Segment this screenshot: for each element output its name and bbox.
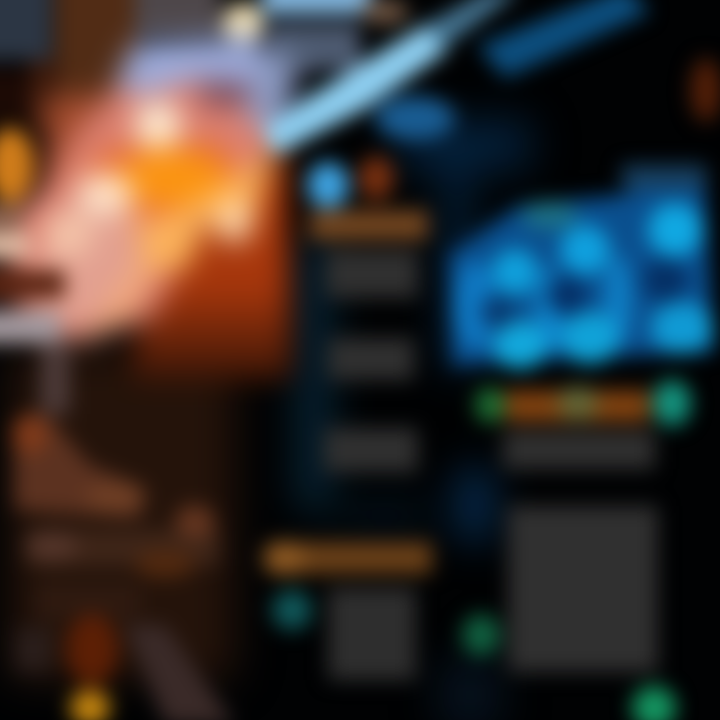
text block: right column body — [508, 506, 658, 672]
panel: dim background glows — [10, 120, 530, 720]
illustration: left edge stripes — [0, 127, 70, 414]
text block: right column subtitle — [503, 431, 655, 469]
icon: green dot bottom — [632, 686, 676, 720]
icon: yellow badge — [70, 690, 110, 720]
icon: blue circle — [307, 162, 349, 208]
illustration: explosion — [10, 35, 300, 345]
text block: lower centre — [328, 588, 416, 680]
icon: green dot middle — [462, 614, 500, 656]
panel: blue glowing chart — [448, 165, 714, 369]
panel: top left haze — [0, 0, 409, 130]
icon: teal square — [272, 590, 312, 630]
illustration: lower left brown shapes — [12, 412, 235, 720]
heading: centre column — [310, 210, 428, 240]
icon: brown circle — [358, 156, 394, 200]
illustration: red-orange lower glow — [45, 95, 292, 380]
heading: lower centre — [263, 541, 432, 575]
heading: right column — [475, 380, 691, 426]
illustration: light blue diagonal beams — [262, 0, 720, 155]
text block: centre column upper — [324, 250, 418, 472]
